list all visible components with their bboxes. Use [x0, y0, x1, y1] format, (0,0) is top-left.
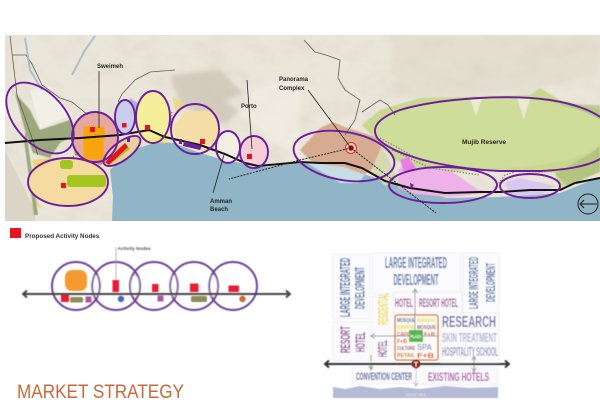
programme diagram: RESIDENTIAL [375, 293, 392, 325]
north arrow [578, 194, 598, 214]
legend: proposed activity nodes [10, 228, 100, 240]
highway [5, 130, 600, 193]
programme diagram: DEVELOPMENT [394, 272, 439, 289]
node circles [52, 262, 257, 310]
resort hotel left: HOTEL [352, 332, 368, 352]
map place labels: Sweimeh [97, 64, 123, 70]
map place labels: Complex [279, 86, 305, 92]
large integrated development right [466, 257, 498, 309]
research block [442, 314, 498, 359]
river [25, 36, 95, 90]
programme diagram: CONVENTION CENTER [356, 371, 412, 383]
mixed use labels: MOSQUE [397, 318, 415, 324]
red node blocks [61, 280, 239, 302]
olive blocks [70, 296, 207, 302]
orange anchor shape [65, 270, 87, 291]
map place labels: Mujib Reserve [462, 139, 506, 146]
overlap lenses [92, 275, 218, 297]
panorama complex marker [346, 142, 356, 154]
purple facility blocks [127, 138, 414, 189]
dotted connector zones [73, 112, 560, 188]
mixed use labels: MOSQUE [417, 325, 436, 331]
programme diagram: SKIN TREATMENT [442, 330, 497, 345]
text: DEVELOPMENT [483, 263, 498, 302]
map panel [0, 35, 600, 221]
dead sea band [333, 386, 498, 398]
dashed transit arrow [414, 368, 418, 386]
diagram tile backgrounds [333, 253, 499, 385]
dead sea band: DEAD SEA [406, 392, 426, 397]
proposed activity node markers [61, 123, 252, 188]
mixed use labels: RESIDENTIAL [397, 325, 415, 331]
blue and orange dots [118, 296, 246, 302]
purple destination ellipses [0, 70, 600, 206]
programme diagram: LARGE INTEGRATED [385, 255, 447, 272]
resort hotel left [337, 326, 368, 353]
text: LARGE INTEGRATED [466, 257, 481, 309]
central plaza block [395, 315, 438, 360]
mixed use labels: CAFE [397, 332, 410, 338]
hotel and resort hotel row: HOTEL [395, 296, 413, 310]
text: LARGE INTEGRATED [337, 258, 354, 317]
map place labels: Beach [210, 207, 228, 213]
activity nodes callout [116, 246, 151, 281]
mixed use labels: CULTURE [397, 346, 415, 352]
research block: RESEARCH [442, 314, 496, 331]
programme diagram: HOTEL [375, 340, 390, 357]
concept diagram [23, 246, 290, 310]
map place labels: Amman [210, 199, 232, 205]
title: MARKET STRATEGY [17, 382, 184, 403]
spa label: SPA [417, 343, 432, 352]
mixed use labels: RESIDENTIAL [417, 318, 436, 324]
text: HOSPITALITY SCHOOL [442, 344, 498, 359]
activity nodes callout: Activity Nodes [118, 246, 151, 252]
food and beverage label: F+B [417, 353, 434, 360]
large integrated development top [385, 255, 447, 289]
hotel and resort hotel row [395, 296, 458, 310]
land use zones [15, 87, 600, 215]
mixed use labels: F+B [397, 339, 407, 345]
mixed use labels: F+B [424, 332, 435, 338]
mountain roads [10, 36, 395, 155]
mixed use labels: RETAIL [397, 353, 416, 359]
agricultural blocks [60, 146, 130, 187]
leader arrows [99, 71, 351, 193]
sea [110, 142, 600, 221]
terrain base [5, 35, 600, 221]
mixed use labels [397, 318, 436, 359]
map place labels: Porto [241, 104, 257, 110]
legend: proposed activity nodes: Proposed Activity Nodes [25, 233, 100, 240]
plaza: PLAZA [410, 334, 422, 339]
road axis [325, 360, 509, 368]
main axis arrow [23, 290, 290, 298]
dashed axis arrows [229, 148, 436, 213]
large integrated development left [337, 258, 368, 317]
programme diagram [325, 253, 509, 398]
map place labels: Panorama [279, 77, 309, 83]
programme diagram: DEVELOPMENT [352, 267, 368, 309]
purple squares [86, 296, 164, 302]
transit node [412, 360, 420, 368]
transit node: T [414, 362, 418, 368]
map place labels [97, 64, 506, 213]
existing hotels label: EXISTING HOTELS [428, 370, 489, 384]
programme diagram: RESORT [337, 326, 353, 353]
programme diagram: RESORT HOTEL [419, 296, 458, 310]
plaza connector arrows [369, 289, 476, 372]
